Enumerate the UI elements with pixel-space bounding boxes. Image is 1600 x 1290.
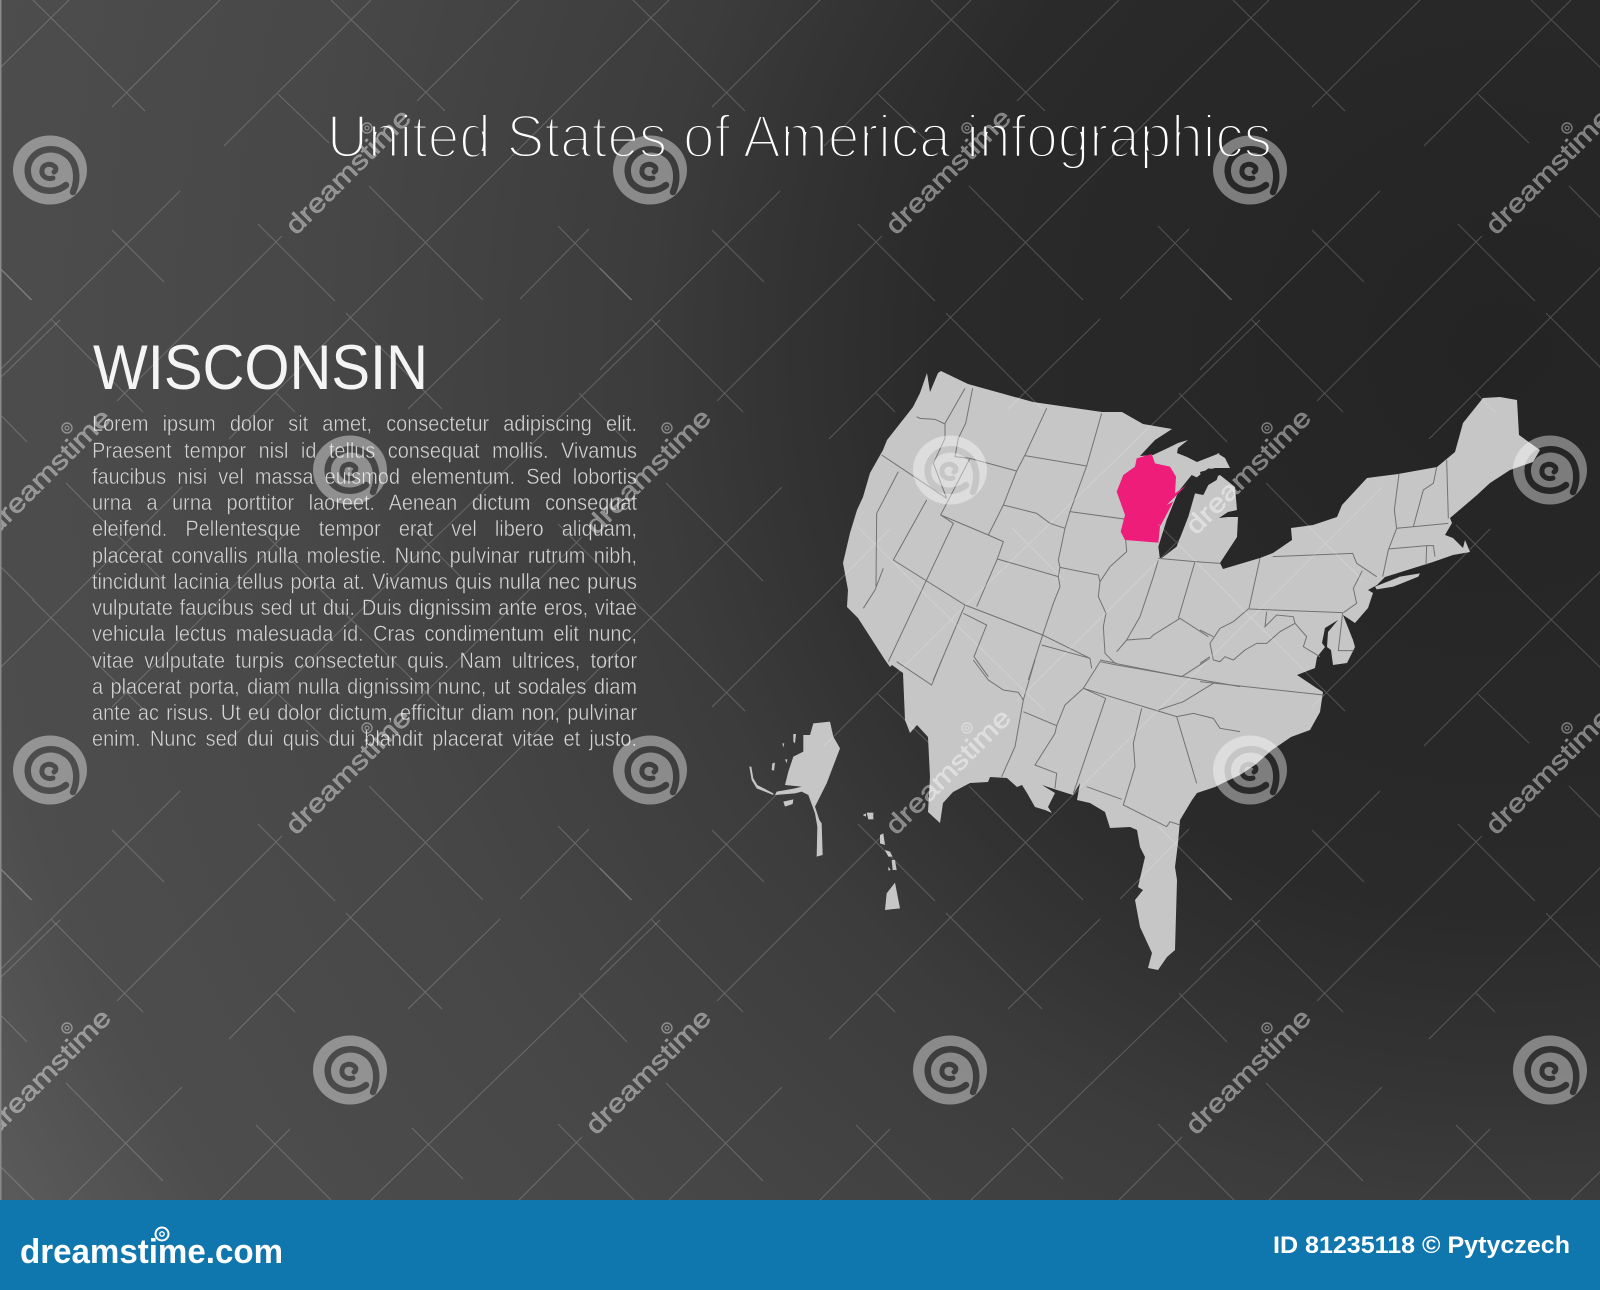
watermark wordmarks: dreamstime [1179, 402, 1317, 540]
watermark copyright rings [62, 123, 1572, 1033]
state borders: south [897, 660, 1240, 827]
watermark wordmarks: dreamstime [1479, 702, 1600, 840]
watermark wordmarks: dreamstime [1479, 102, 1600, 240]
body text block: Lorem ipsum dolor sit amet, consectetur adipiscing elit. [92, 411, 637, 436]
body text block: tincidunt lacinia tellus porta at. Vivamus quis nulla nec purus [92, 569, 637, 594]
title: United States of America infographics [327, 103, 1272, 170]
state borders: west and midwest [863, 388, 1220, 680]
body text block: placerat convallis nulla molestie. Nunc pulvinar rutrum nibh, [92, 542, 637, 568]
body text block: ante ac risus. Ut eu dolor dictum, efficitur diam non, pulvinar [92, 700, 637, 725]
body text block: vitae vulputate turpis consectetur quis. Nam ultrices, tortor [92, 648, 637, 672]
footer bar [0, 1200, 1600, 1290]
body text block: faucibus nisi vel massa euismod elementum. Sed lobortis [92, 464, 637, 489]
footer image id and credit: ID 81235118 © Pytyczech [1273, 1232, 1570, 1259]
body text block: vulputate faucibus sed ut dui. Duis dignissim ante eros, vitae [92, 595, 637, 620]
watermark wordmarks: dreamstime [1179, 1002, 1317, 1140]
body text block: vehicula lectus malesuada id. Cras condimentum elit nunc, [92, 621, 637, 646]
Alaska and Aleutian islands [749, 722, 840, 857]
Long Island [1375, 573, 1420, 589]
map: United States [749, 371, 1540, 970]
watermark wordmarks: dreamstime [879, 102, 1017, 240]
footer logo wordmark: dreamstime.com [20, 1233, 283, 1271]
Lake Michigan [1158, 468, 1220, 559]
watermark wordmarks: dreamstime [279, 702, 417, 840]
Wisconsin highlighted state [1117, 454, 1187, 543]
body text block: Praesent tempor nisl id tellus consequat mollis. Vivamus [92, 438, 637, 462]
body text block: enim. Nunc sed dui quis dui blandit placerat vitae et justo. [92, 726, 637, 751]
watermark wordmarks: dreamstime [579, 402, 717, 540]
watermark spirals [8, 128, 1592, 1112]
watermark wordmarks: dreamstime [579, 1002, 717, 1140]
body text block: urna a urna porttitor laoreet. Aenean dictum consequat [92, 490, 637, 515]
contiguous states landmass [843, 371, 1540, 970]
Hawaii islands [863, 813, 900, 910]
body text block: eleifend. Pellentesque tempor erat vel libero aliquam, [92, 516, 637, 541]
heading: state name: WISCONSIN [93, 333, 428, 403]
state borders: northeast [1200, 460, 1448, 695]
body text block: a placerat porta, diam nulla dignissim nunc, ut sodales diam [92, 674, 637, 699]
watermark wordmarks: dreamstime [879, 702, 1017, 840]
body text block [92, 411, 637, 751]
watermark wordmarks: dreamstime [279, 102, 417, 240]
